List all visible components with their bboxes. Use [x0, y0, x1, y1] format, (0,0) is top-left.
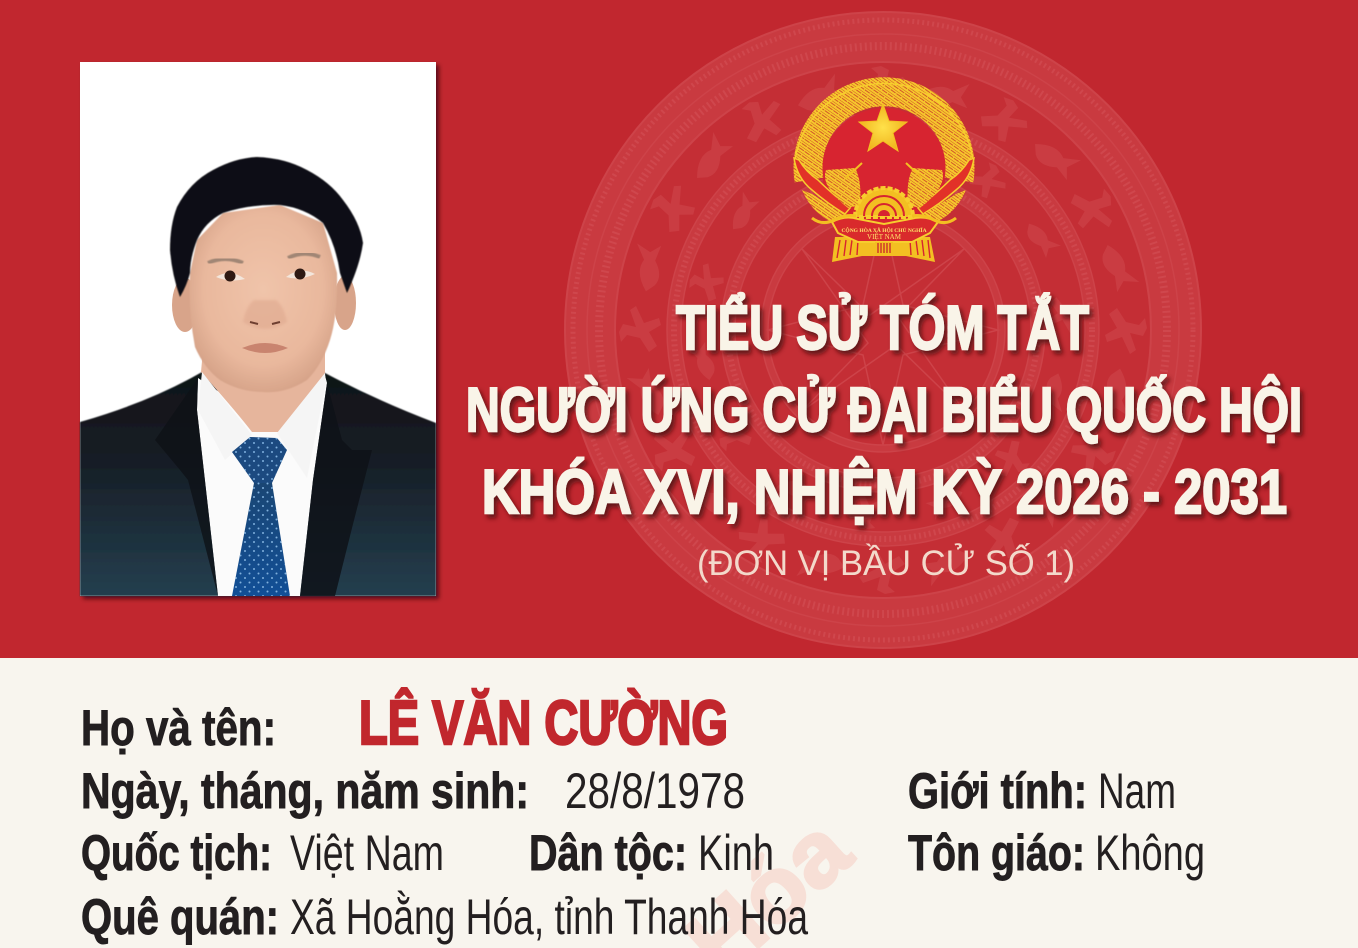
pedestal — [832, 237, 935, 262]
mouth — [242, 343, 288, 353]
bronze drum pattern — [565, 12, 1201, 648]
pedestal stripes — [875, 242, 893, 253]
wheat wreath — [808, 92, 960, 180]
banner text: CỘNG HÒA XÃ HỘI CHỦ NGHĨA — [841, 226, 927, 234]
nationality row — [81, 825, 1205, 881]
banner text: VIỆT NAM — [867, 233, 902, 241]
jacket — [80, 372, 436, 596]
ears — [172, 278, 198, 332]
nationality row: Việt Nam — [290, 825, 444, 881]
star — [859, 104, 907, 151]
name row: Họ và tên: — [81, 700, 276, 756]
title: TIỂU SỬ TÓM TẮT — [676, 294, 1089, 363]
birth and gender row — [81, 763, 1176, 819]
nationality row: Tôn giáo: — [908, 825, 1085, 881]
hair — [170, 157, 363, 297]
gear — [855, 188, 913, 217]
eyebrows — [208, 259, 243, 263]
name row: LÊ VĂN CƯỜNG — [359, 689, 728, 758]
birth and gender row: Ngày, tháng, năm sinh: — [81, 763, 529, 819]
birth and gender row: Nam — [1098, 763, 1176, 819]
wheat sprays — [802, 190, 966, 226]
banner text — [841, 226, 927, 241]
shirt — [197, 372, 327, 596]
ribbons — [794, 158, 850, 214]
face — [190, 205, 337, 392]
background: red header — [0, 0, 1358, 660]
info panel — [0, 658, 1358, 948]
portrait photo — [80, 62, 436, 596]
nationality row: Quốc tịch: — [81, 825, 272, 881]
subtitle: (ĐƠN VỊ BẦU CỬ SỐ 1) — [697, 543, 1075, 583]
hometown row: Xã Hoằng Hóa, tỉnh Thanh Hóa — [290, 889, 808, 945]
hometown row — [81, 889, 808, 945]
tie — [232, 437, 290, 596]
hometown row: Quê quán: — [81, 889, 279, 945]
lapels — [155, 378, 218, 596]
nationality row: Không — [1095, 825, 1205, 881]
nationality row: Dân tộc: — [529, 825, 687, 881]
inner red disc — [822, 108, 946, 232]
national emblem — [794, 83, 974, 262]
banner — [832, 218, 938, 242]
scrolls — [812, 216, 956, 223]
eyes — [216, 273, 245, 281]
title — [466, 294, 1302, 527]
neck — [201, 345, 325, 432]
birth and gender row: 28/8/1978 — [565, 763, 745, 819]
birth and gender row: Giới tính: — [908, 763, 1087, 819]
nationality row: Kinh — [698, 825, 774, 881]
name row — [81, 689, 728, 758]
nose — [243, 300, 287, 329]
